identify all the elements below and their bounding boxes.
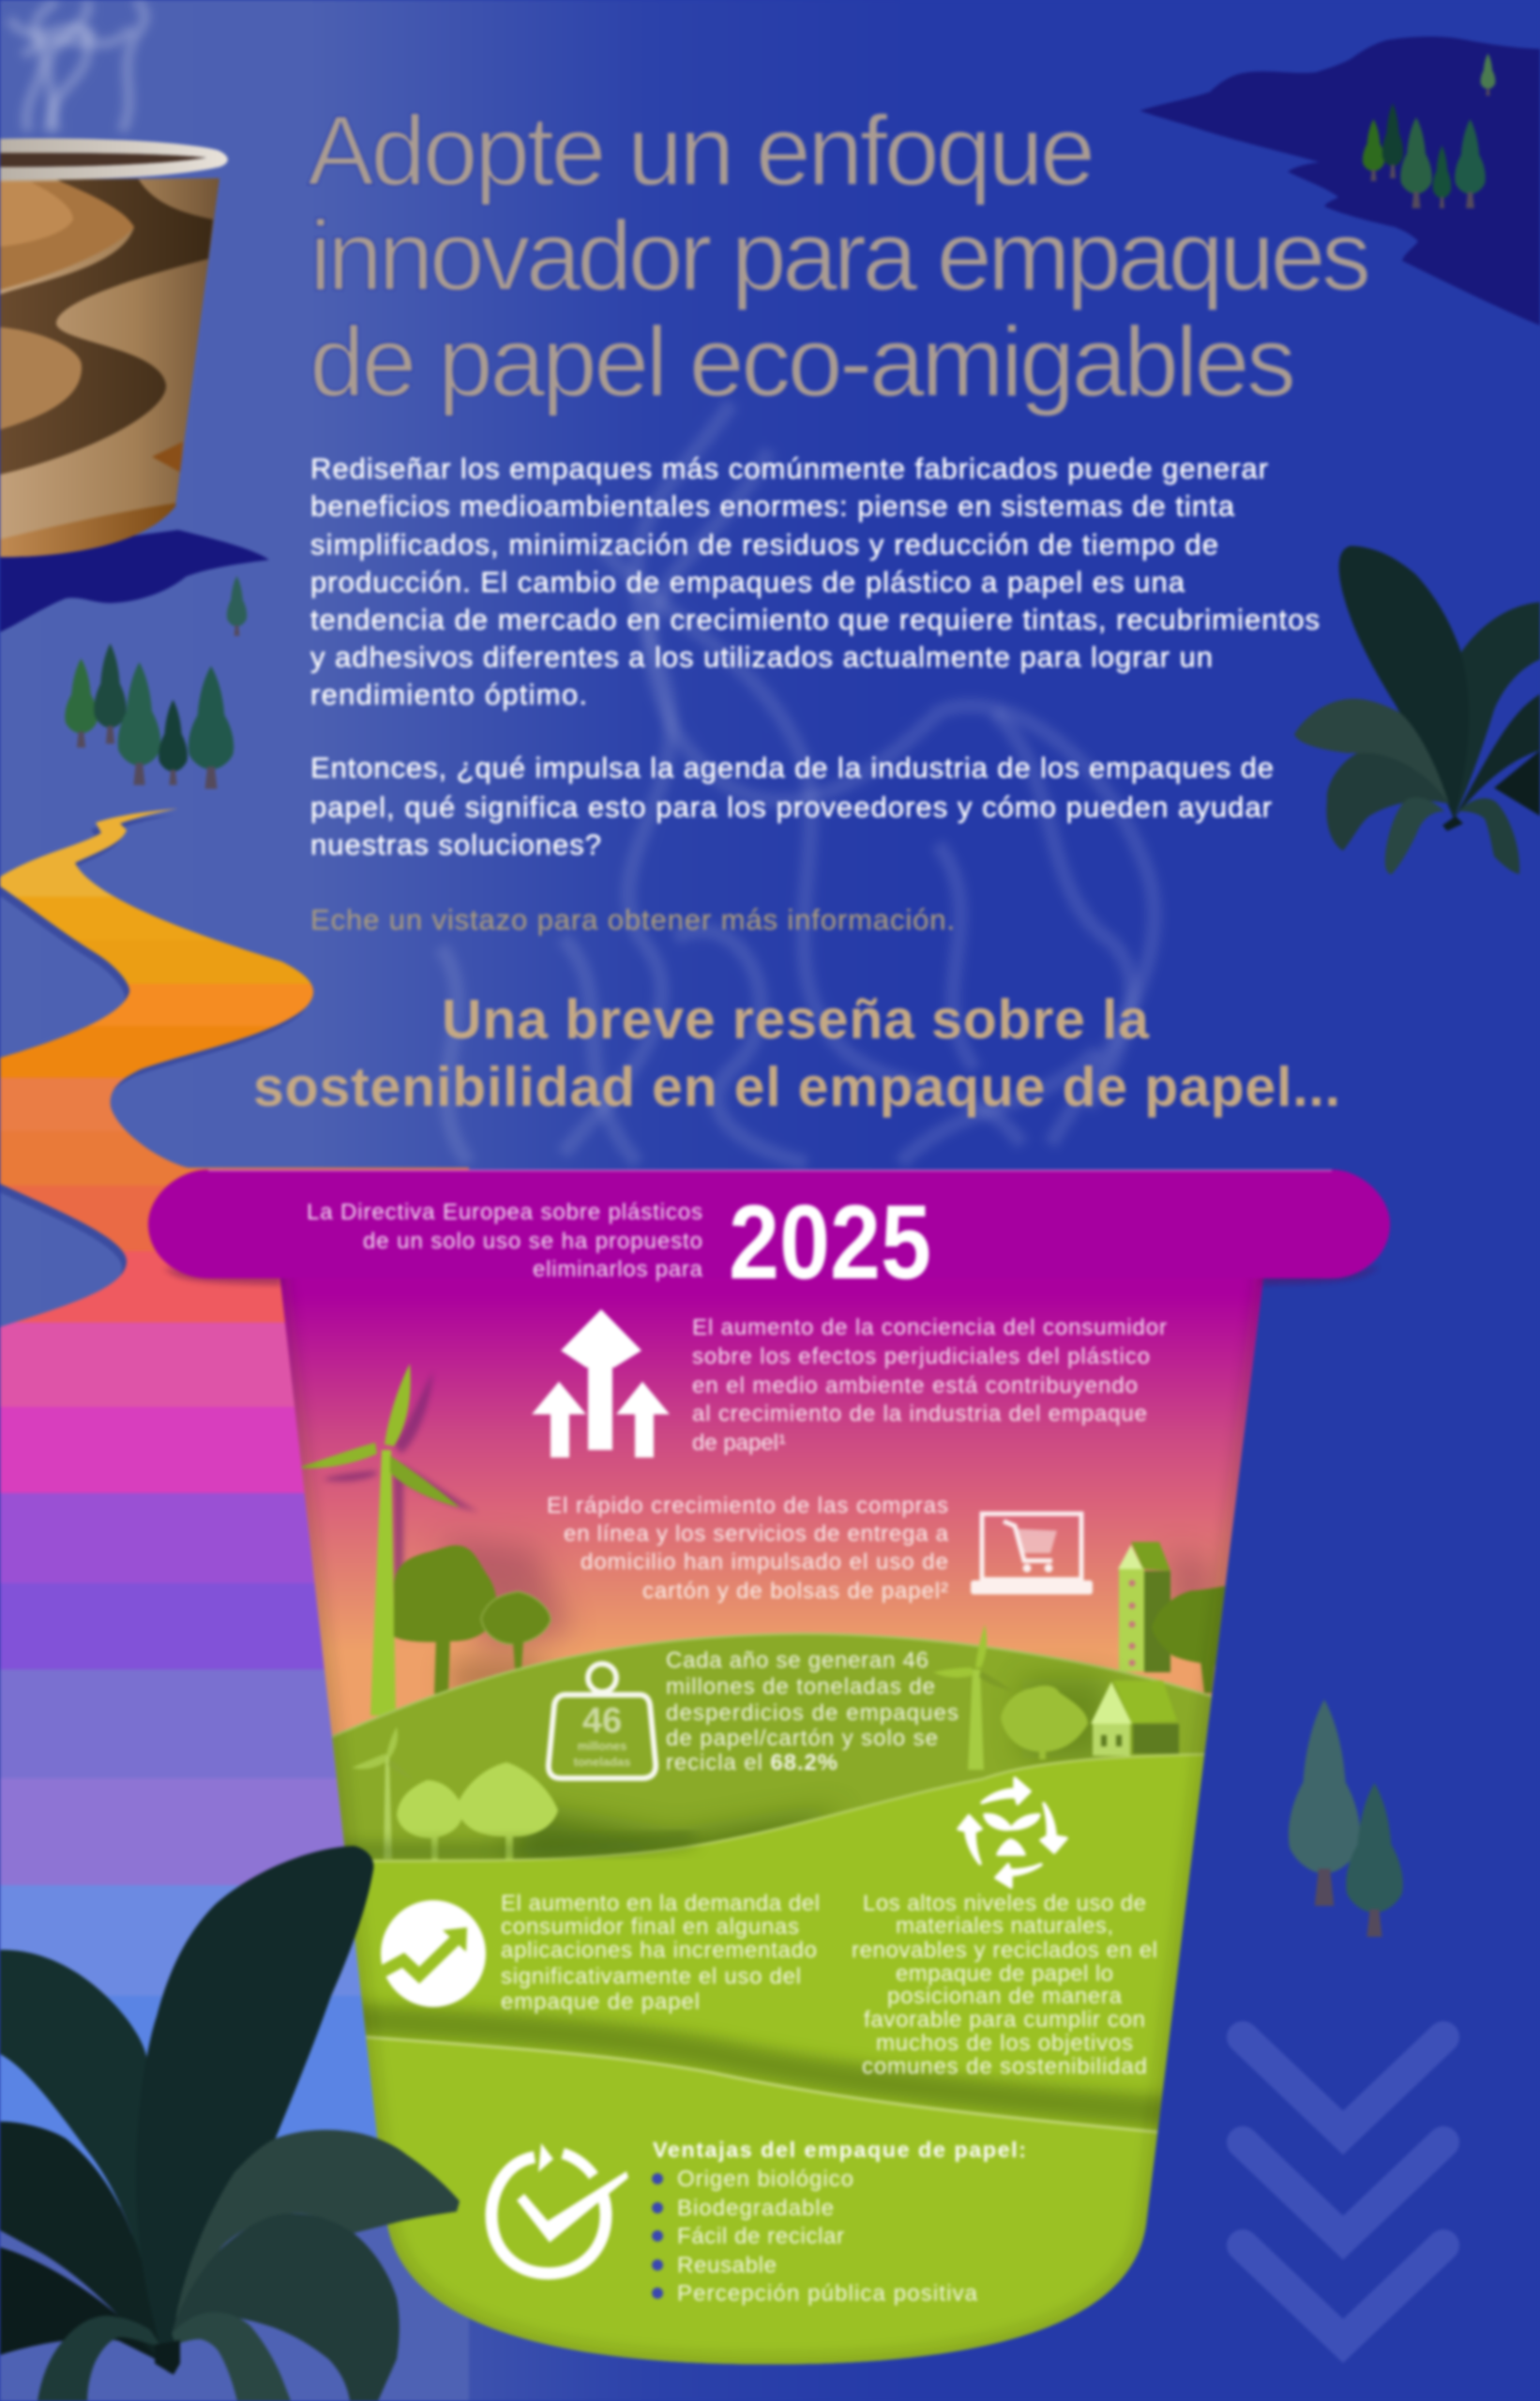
icon: weight 46: millones: [578, 1739, 627, 1753]
hill back: [319, 1634, 1229, 1866]
text: waste stat: [666, 1648, 959, 1775]
text: consumer awareness: en el medio ambiente está contribuyendo: [692, 1373, 1138, 1398]
title: [308, 96, 1371, 417]
icon: weight 46: toneladas: [574, 1755, 630, 1769]
section heading: sostenibilidad en el empaque de papel...: [253, 1056, 1340, 1118]
text: end consumer demand: El aumento en la demanda del: [501, 1891, 820, 1916]
icon: recycle: [959, 1778, 1066, 1887]
rim shadow ends: [164, 1266, 1379, 1285]
stat: 2025 directive: [307, 1184, 931, 1301]
light trees: [397, 1762, 558, 1860]
wind turbine large: [297, 1364, 478, 1715]
cup inner edge shading: [278, 1257, 1266, 2364]
stat: 2025 directive: eliminarlos para: [533, 1257, 703, 1282]
text: natural materials: muchos de los objetivos: [876, 2031, 1133, 2056]
house: [1091, 1681, 1179, 1756]
icon: weight 46: 46: [582, 1701, 622, 1741]
text: waste stat: recicla el 68.2%: [666, 1750, 838, 1775]
smoke at centre: [441, 403, 1155, 1163]
list: advantages of paper packaging: Ventajas del empaque de papel:: [653, 2137, 1026, 2162]
section heading: Una breve reseña sobre la: [442, 989, 1150, 1050]
tree small left: [481, 1592, 551, 1644]
soft shadows behind scenery: [441, 1538, 1215, 1698]
text: end consumer demand: empaque de papel: [501, 1989, 700, 2015]
text: natural materials: posicionan de manera: [887, 1984, 1123, 2009]
text: waste stat: de papel/cartón y solo se: [666, 1726, 938, 1751]
tree large left: [394, 1546, 551, 1694]
stat: 2025 directive: 2025: [729, 1184, 931, 1301]
icon: growth chart circle: [381, 1900, 486, 2007]
shadow under green band: [319, 1836, 694, 1852]
smoke at top left: [9, 0, 144, 131]
hill front: [319, 2033, 1229, 2382]
light tree on hill: [1001, 1685, 1088, 1759]
text: consumer awareness: al crecimiento de la industria del empaque: [692, 1401, 1147, 1427]
text: online shopping: El rápido crecimiento de las compras: [547, 1493, 948, 1518]
title: innovador para empaques: [310, 201, 1371, 311]
intro text block: simplificados, minimización de residuos y reducción de tiempo de: [310, 528, 1218, 561]
text: online shopping: domicilio han impulsado el uso de: [581, 1549, 948, 1575]
trees right: [1289, 1699, 1403, 1937]
text: online shopping: en línea y los servicios de entrega a: [564, 1521, 949, 1547]
plant right: [1294, 546, 1540, 874]
intro text block: tendencia de mercado en crecimiento que requiere tintas, recubrimientos: [310, 603, 1320, 636]
stat: 2025 directive: de un solo uso se ha propuesto: [363, 1229, 702, 1254]
text: waste stat: desperdicios de empaques: [666, 1700, 959, 1726]
river of colored stripes: [0, 807, 469, 2401]
title: Adopte un enfoque: [308, 96, 1095, 206]
list: advantages of paper packaging: Percepción pública positiva: [677, 2281, 978, 2306]
intro text block: y adhesivos diferentes a los utilizados actualmente para lograr un: [310, 641, 1213, 673]
tower: [1118, 1542, 1170, 1672]
intro text block: Rediseñar los empaques más comúnmente fabricados puede generar: [310, 452, 1268, 485]
left small turbine: [353, 1728, 399, 1860]
text: natural materials: materiales naturales,: [896, 1913, 1113, 1939]
list: advantages of paper packaging: Biodegradable: [677, 2196, 834, 2221]
text: natural materials: [852, 1891, 1157, 2079]
list: advantages of paper packaging: [652, 2137, 1026, 2306]
cup rim band: [148, 1170, 1390, 1278]
intro text block: producción. El cambio de empaques de plástico a papel es una: [310, 566, 1185, 598]
text: natural materials: comunes de sostenibilidad: [862, 2054, 1147, 2079]
text: end consumer demand: aplicaciones ha incrementado: [501, 1938, 817, 1963]
text: online shopping: [547, 1493, 949, 1604]
river shadow: [0, 815, 309, 1413]
icon: laptop with cart: [971, 1514, 1093, 1594]
island top right with trees: [1140, 37, 1540, 325]
icon: weight 46: [549, 1664, 656, 1778]
text: consumer awareness: sobre los efectos perjudiciales del plástico: [692, 1344, 1150, 1369]
tree right: [1152, 1585, 1230, 1693]
stat: 2025 directive: La Directiva Europea sobre plásticos: [307, 1200, 702, 1225]
cup body: [0, 169, 225, 563]
small tree near cup: [227, 576, 247, 636]
text: consumer awareness: [692, 1315, 1167, 1456]
forest left: [65, 643, 234, 789]
intro text block: [310, 452, 1320, 711]
hill middle: [371, 1752, 1205, 1884]
text: online shopping: cartón y de bolsas de papel²: [642, 1578, 948, 1604]
question text block: papel, qué significa esto para los proveedores y cómo pueden ayudar: [310, 791, 1272, 823]
plant bottom left: [0, 1846, 460, 2401]
text: consumer awareness: El aumento de la conciencia del consumidor: [692, 1315, 1167, 1340]
chevrons: [1243, 2037, 1443, 2341]
text: natural materials: Los altos niveles de uso de: [863, 1891, 1146, 1916]
hill edge shadow above front hill: [319, 2016, 1229, 2118]
icon: three up arrows: [532, 1309, 670, 1457]
text: waste stat: Cada año se generan 46: [666, 1648, 929, 1673]
title: de papel eco-amigables: [310, 307, 1296, 417]
intro text block: rendimiento óptimo.: [310, 678, 587, 711]
text: waste stat: millones de toneladas de: [666, 1674, 935, 1699]
small turbine on hill: [935, 1624, 1004, 1771]
section heading: [253, 989, 1340, 1118]
paper cup illustration: [0, 139, 269, 632]
list: advantages of paper packaging: Reusable: [677, 2253, 777, 2278]
question text block: nuestras soluciones?: [310, 828, 601, 861]
call to action: Eche un vistazo para obtener más información.: [310, 903, 955, 936]
large cup panel: [148, 1170, 1390, 2382]
question text block: Entonces, ¿qué impulsa la agenda de la industria de los empaques de: [310, 751, 1274, 784]
cup shadow island: [0, 530, 269, 632]
text: end consumer demand: significativamente el uso del: [501, 1964, 801, 1989]
text: natural materials: renovables y reciclados en el: [852, 1938, 1157, 1963]
cup body: [263, 1257, 1276, 2382]
cup rim: [0, 139, 228, 180]
hill depth shadows: [506, 1679, 1107, 1866]
text: end consumer demand: [501, 1891, 820, 2015]
text: natural materials: favorable para cumplir con: [864, 2007, 1145, 2032]
text: consumer awareness: de papel¹: [692, 1430, 786, 1456]
text: natural materials: empaque de papel lo: [896, 1961, 1113, 1986]
text: end consumer demand: consumidor final en algunas: [501, 1914, 799, 1940]
intro text block: beneficios medioambientales enormes: piense en sistemas de tinta: [310, 490, 1235, 522]
list: advantages of paper packaging: Fácil de reciclar: [677, 2224, 844, 2249]
icon: circular check: [491, 2143, 628, 2273]
question text block: [310, 751, 1274, 861]
list: advantages of paper packaging: Origen biológico: [677, 2167, 853, 2192]
